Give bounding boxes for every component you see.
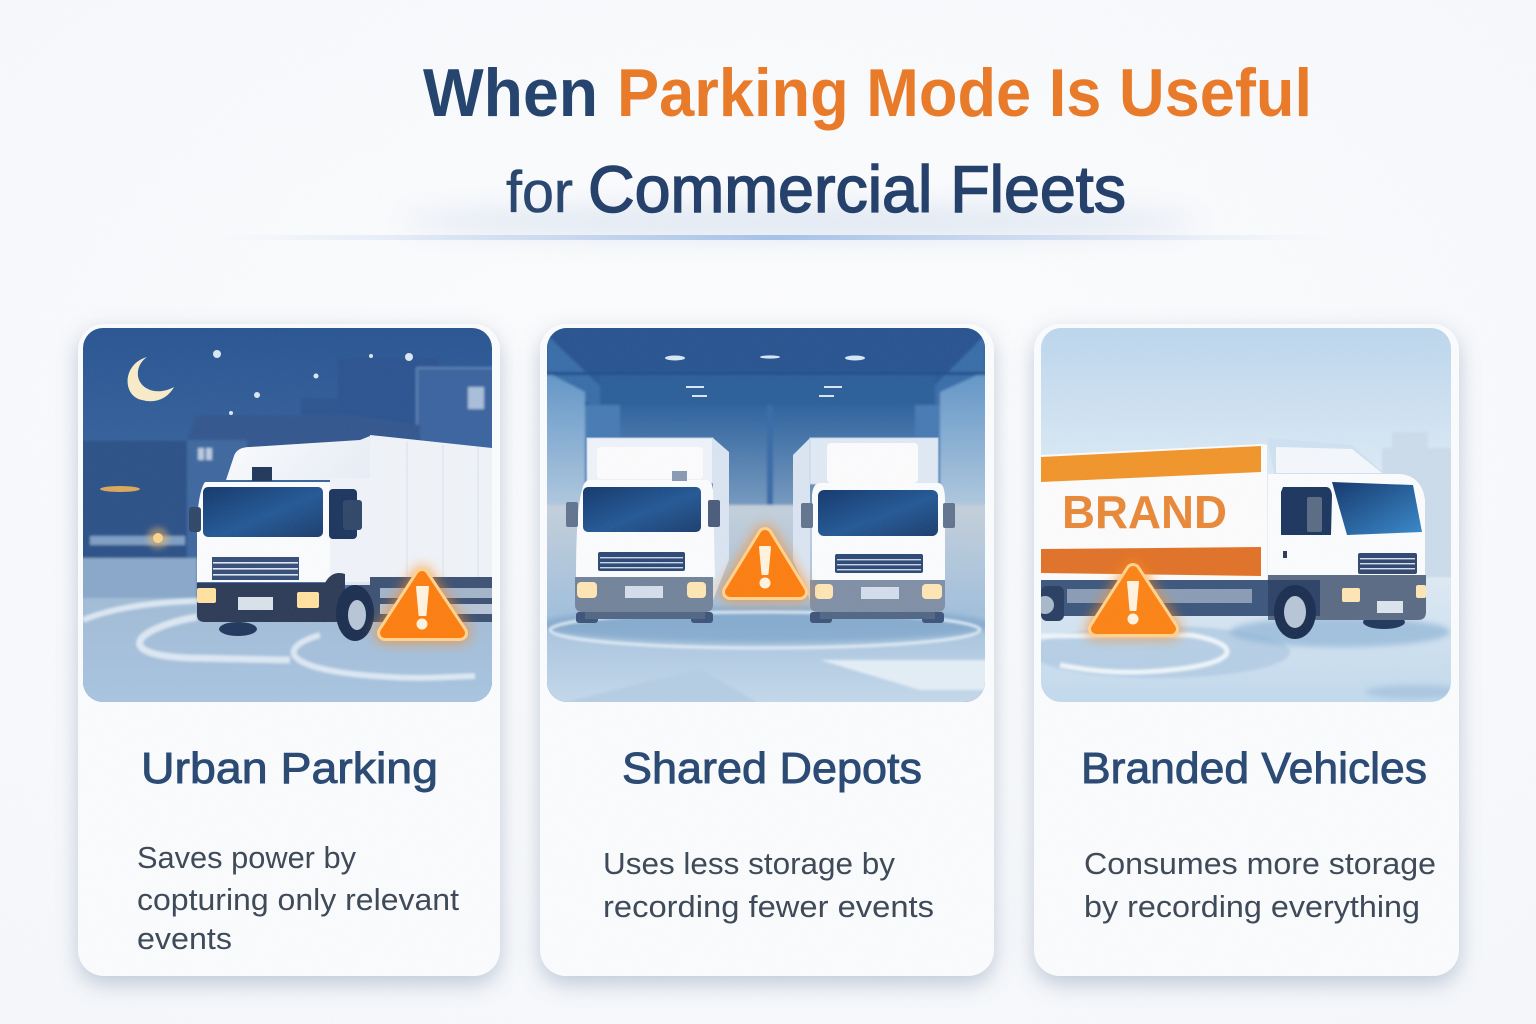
text: shared depots description: Uses less storage by <box>603 846 896 881</box>
text: branded vehicles description: Consumes more storage <box>1084 846 1436 881</box>
heading: shared depots: Shared Depots <box>622 744 922 793</box>
icon: warning triangle <box>730 535 800 592</box>
text: urban parking description: events <box>137 921 232 956</box>
title: for <box>506 160 573 225</box>
illustration: truck parked at night <box>83 328 492 702</box>
title: Commercial Fleets <box>588 152 1126 226</box>
illustration: branded truck <box>1030 328 1465 702</box>
text: urban parking description: Saves power by <box>137 840 356 875</box>
illustration: trucks in depot <box>547 328 985 702</box>
panel: urban parking <box>70 324 510 976</box>
icon: warning triangle <box>385 576 460 633</box>
brand lettering: BRAND <box>1062 486 1227 538</box>
truck bumper and wheels <box>219 622 257 636</box>
text: urban parking description <box>137 840 459 956</box>
title <box>423 55 1312 226</box>
icon: warning triangle <box>1096 571 1171 629</box>
text: shared depots description <box>603 846 934 924</box>
text: shared depots description: recording fewer events <box>603 889 934 924</box>
title: When <box>423 55 598 131</box>
right truck <box>793 438 955 623</box>
left truck <box>566 438 729 623</box>
panel: shared depots <box>535 316 1000 976</box>
panel: branded vehicles <box>1030 324 1465 976</box>
truck cab <box>1267 438 1385 476</box>
truck box <box>370 435 492 582</box>
title: Parking Mode Is Useful <box>617 55 1312 131</box>
text: branded vehicles description <box>1084 846 1436 924</box>
text: urban parking description: copturing only relevant <box>137 882 459 917</box>
heading: branded vehicles: Branded Vehicles <box>1081 744 1427 793</box>
truck trailer <box>1041 444 1267 582</box>
text: branded vehicles description: by recording everything <box>1084 889 1420 924</box>
heading: urban parking: Urban Parking <box>141 744 438 793</box>
icon: crescent moon <box>128 357 174 401</box>
truck cab <box>197 482 330 582</box>
